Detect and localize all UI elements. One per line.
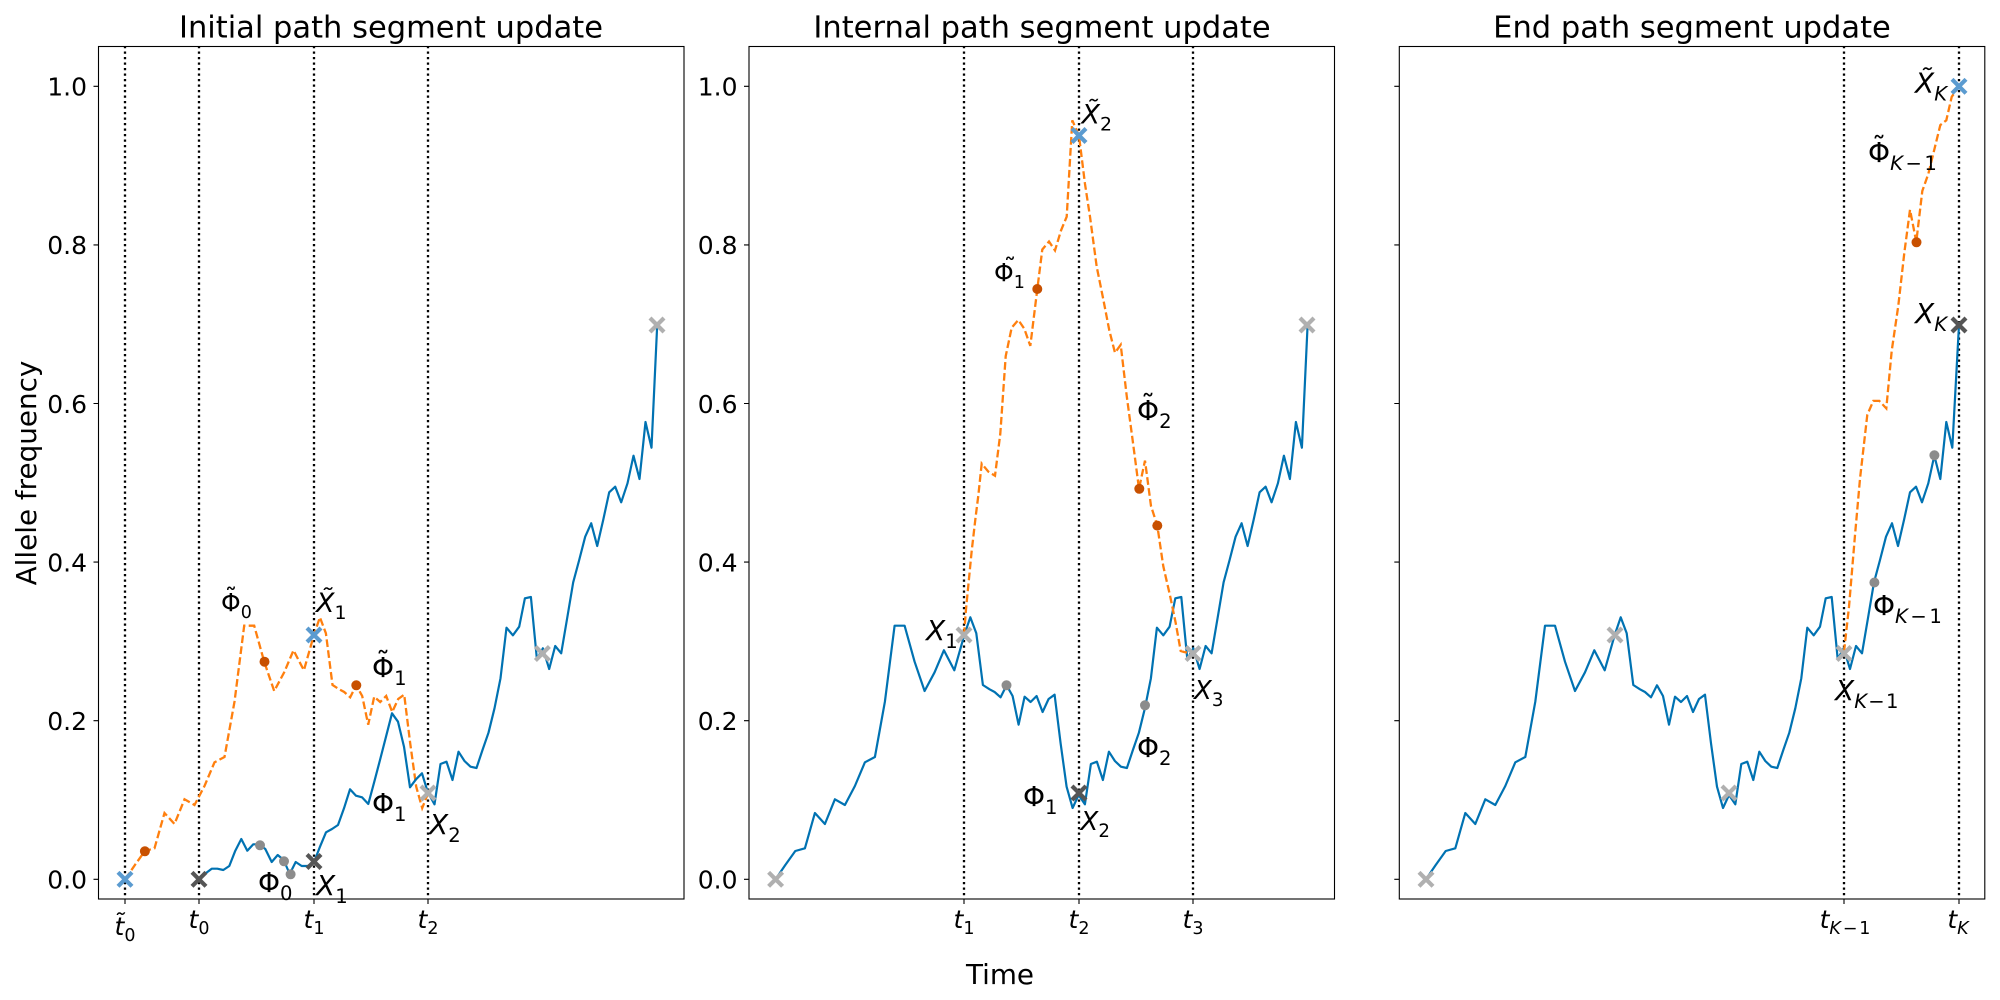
y tick labels: 0.8 bbox=[698, 231, 738, 260]
title: Initial path segment update bbox=[179, 10, 603, 46]
cross markers bbox=[769, 128, 1314, 886]
annotation: phi 1: Φ bbox=[1023, 780, 1045, 813]
annotation: phi tilde 0: Φ bbox=[221, 588, 241, 617]
annotation: phi tilde 0: ˜ bbox=[225, 583, 237, 612]
y tick labels: 1.0 bbox=[47, 72, 87, 102]
x tick labels: t bbox=[1820, 905, 1831, 934]
annotation: X tilde K: K bbox=[1934, 82, 1949, 106]
annotation: phi tilde 2: Φ bbox=[1137, 394, 1159, 427]
annotation: X tilde 1: 1 bbox=[334, 602, 347, 624]
axes frame and ticks bbox=[94, 46, 684, 904]
y tick labels: 0.0 bbox=[698, 866, 738, 894]
y axis label: Allele frequency bbox=[10, 361, 43, 585]
annotation: phi tilde K-1: K−1 bbox=[1890, 152, 1937, 175]
annotation: phi 1: 1 bbox=[1045, 796, 1058, 819]
grey dots bbox=[1002, 680, 1150, 710]
annotation: X 2: X bbox=[1078, 807, 1100, 837]
panel: internal path segment update bbox=[698, 10, 1334, 939]
annotation: phi tilde 2: ˜ bbox=[1141, 388, 1155, 421]
panel: initial path segment update bbox=[47, 10, 684, 946]
annotation: X 3: 3 bbox=[1212, 690, 1223, 711]
x tick labels bbox=[954, 905, 1203, 939]
proposed path: orange dashed bbox=[964, 120, 1193, 654]
y tick labels bbox=[698, 72, 738, 894]
grey dots bbox=[1869, 450, 1939, 588]
x tick labels: K−1 bbox=[1829, 919, 1870, 939]
annotation: phi tilde 1: ˜ bbox=[1004, 253, 1016, 282]
annotation: phi 1: 1 bbox=[394, 803, 407, 826]
orange dot bbox=[1912, 237, 1922, 247]
annotation: phi 0: Φ bbox=[258, 866, 280, 899]
y tick labels: 0.6 bbox=[47, 390, 87, 419]
annotation: phi K-1: K−1 bbox=[1895, 605, 1942, 628]
current path: blue bbox=[1426, 325, 1959, 879]
annotation: phi tilde 1: Φ bbox=[372, 651, 394, 684]
annotation: X 2: X bbox=[427, 808, 449, 841]
y tick labels: 0.2 bbox=[47, 707, 87, 736]
annotation: X tilde 2: 2 bbox=[1100, 114, 1112, 136]
annotation: phi 2: Φ bbox=[1137, 731, 1159, 764]
x tick labels: 1 bbox=[313, 919, 324, 939]
annotation: X K-1: X bbox=[1833, 674, 1855, 707]
annotation: X tilde 2: X̃ bbox=[1080, 99, 1100, 130]
y tick labels: 0.2 bbox=[698, 707, 738, 736]
time markers bbox=[125, 46, 428, 899]
axes frame and ticks bbox=[744, 46, 1334, 904]
x tick labels: t bbox=[954, 905, 965, 934]
annotation: phi tilde 2: 2 bbox=[1159, 410, 1172, 433]
x tick labels: t bbox=[1947, 905, 1958, 934]
annotation: X 1: 1 bbox=[945, 630, 958, 653]
annotation: X K-1: K−1 bbox=[1854, 690, 1898, 713]
x tick labels bbox=[115, 905, 438, 946]
x tick labels: t bbox=[1183, 905, 1194, 934]
annotation: X tilde K: X̃ bbox=[1913, 66, 1935, 100]
annotation: phi 2: 2 bbox=[1159, 747, 1172, 770]
orange dots bbox=[1032, 284, 1162, 531]
annotation: phi 0: 0 bbox=[280, 882, 293, 905]
time markers bbox=[964, 46, 1193, 899]
y tick labels: 0.4 bbox=[698, 548, 738, 578]
cross markers bbox=[1419, 79, 1966, 886]
annotation: phi tilde 1: ˜ bbox=[376, 645, 390, 678]
annotation: phi tilde 1: Φ bbox=[994, 258, 1014, 287]
annotation: phi 1: Φ bbox=[372, 787, 394, 820]
annotation: X 2: 2 bbox=[1098, 821, 1110, 842]
x tick labels: 0 bbox=[124, 926, 135, 946]
y tick labels: 1.0 bbox=[698, 72, 738, 102]
x axis label: Time bbox=[965, 958, 1034, 991]
annotation: X tilde 1: X̃ bbox=[314, 587, 335, 619]
y tick labels: 0.4 bbox=[47, 548, 87, 578]
annotation: X 1: 1 bbox=[335, 885, 348, 908]
annotation: X 1: X bbox=[924, 614, 946, 647]
x tick labels: t bbox=[189, 905, 200, 934]
x tick labels: t̃ bbox=[115, 912, 126, 941]
x tick labels: 0 bbox=[198, 919, 209, 939]
y tick labels bbox=[47, 72, 87, 894]
orange dots bbox=[140, 657, 361, 856]
title: Internal path segment update bbox=[813, 10, 1271, 46]
annotation: X 2: 2 bbox=[448, 824, 461, 847]
grey dots bbox=[255, 840, 296, 879]
annotation: X K: K bbox=[1934, 313, 1949, 336]
x tick labels bbox=[1820, 905, 1970, 939]
annotation: phi K-1: Φ bbox=[1873, 589, 1895, 622]
x tick labels: K bbox=[1957, 919, 1970, 939]
x tick labels: 2 bbox=[1078, 919, 1089, 939]
current path: blue bbox=[199, 325, 657, 879]
time markers bbox=[1844, 46, 1959, 899]
annotation: phi tilde 1: 1 bbox=[1014, 273, 1025, 293]
panel: end path segment update bbox=[1394, 10, 1985, 939]
annotation: X 3: X bbox=[1192, 676, 1213, 706]
y tick labels: 0.0 bbox=[47, 866, 87, 894]
annotation: phi tilde 0: 0 bbox=[241, 603, 252, 623]
annotation: phi tilde 1: 1 bbox=[394, 667, 407, 690]
y tick labels: 0.8 bbox=[47, 231, 87, 260]
x tick labels: 3 bbox=[1192, 919, 1203, 939]
x tick labels: 1 bbox=[963, 919, 974, 939]
y tick labels: 0.6 bbox=[698, 390, 738, 419]
proposed path: orange dashed bbox=[125, 617, 428, 879]
current path: blue bbox=[776, 325, 1308, 879]
annotation: phi tilde K-1: Φ bbox=[1868, 136, 1890, 169]
proposed path: orange dashed bbox=[1844, 86, 1959, 652]
annotation: X 1: X bbox=[314, 869, 336, 902]
x tick labels: t bbox=[418, 905, 429, 934]
x tick labels: t bbox=[1069, 905, 1080, 934]
annotation: X K: X bbox=[1913, 297, 1935, 330]
annotation: phi tilde K-1: ˜ bbox=[1872, 130, 1886, 163]
x tick labels: 2 bbox=[427, 919, 438, 939]
x tick labels: t bbox=[304, 905, 315, 934]
title: End path segment update bbox=[1493, 10, 1891, 46]
axes frame and ticks bbox=[1394, 46, 1985, 904]
cross markers bbox=[118, 318, 664, 886]
